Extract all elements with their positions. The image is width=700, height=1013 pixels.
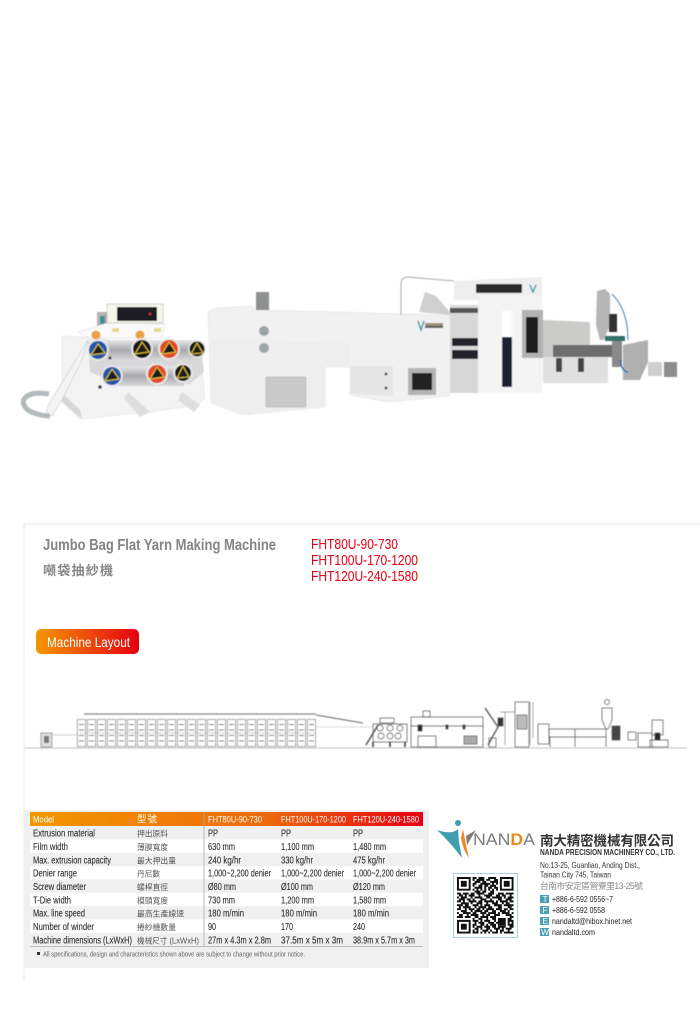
row: max line speed: 180 m/min: [208, 908, 244, 920]
row: denier range: 1,000~2,200 denier: [281, 868, 344, 880]
row: extrusion material: 押出原料: [137, 828, 168, 838]
machine photo: [23, 277, 677, 419]
table header: FHT120U-240-1580: [353, 814, 419, 826]
row: t-die width: 730 mm: [208, 896, 235, 906]
row: extrusion material: PP: [353, 828, 363, 840]
row: number of winder: Number of winder: [33, 922, 95, 933]
machine layout button: Machine Layout: [47, 634, 130, 650]
row: t-die width: 1,580 mm: [353, 896, 386, 906]
row: denier range: Denier range: [33, 868, 77, 880]
table header: FHT80U-90-730: [208, 814, 262, 826]
row: max line speed: 最高生產線速: [137, 908, 184, 918]
row: max line speed: 180 m/min: [281, 908, 317, 920]
contact list: +886-6-592 0558: [552, 905, 605, 915]
row: film width: 630 mm: [208, 842, 235, 853]
row: film width: [33, 842, 386, 853]
row: screw diameter: Ø100 mm: [281, 882, 313, 893]
row: denier range: [33, 868, 416, 880]
title: [43, 537, 276, 578]
contact list: W: [541, 927, 549, 937]
row: number of winder: 170: [281, 922, 293, 933]
table header: FHT100U-170-1200: [281, 814, 346, 826]
row: max extrusion capacity: 最大押出量: [137, 856, 176, 866]
extruder outline: [538, 700, 668, 747]
row: t-die width: 1,200 mm: [281, 896, 314, 906]
row: machine dimensions: 38.9m x 5.7m x 3m: [353, 936, 415, 946]
row: machine dimensions: 27m x 4.3m x 2.8m: [208, 936, 271, 946]
contact list: nandaltd.com: [552, 927, 595, 937]
row: film width: Film width: [33, 842, 68, 853]
company name: 南大精密機械有限公司: [540, 832, 674, 848]
QR code: [454, 874, 518, 938]
table header: Model: [33, 814, 54, 826]
model list: FHT80U-90-730: [311, 537, 398, 553]
address: 台南市安定區管寮里13-25號: [540, 880, 643, 891]
row: number of winder: 捲紗機數量: [137, 922, 176, 932]
machine layout drawing: [25, 700, 687, 748]
row: extrusion material: Extrusion material: [33, 828, 95, 840]
machine layout button: [36, 629, 139, 654]
model list: FHT120U-240-1580: [311, 569, 418, 585]
row: machine dimensions: 機械尺寸 (LxWxH): [137, 936, 199, 946]
row: denier range: 1,000~2,200 denier: [208, 868, 271, 880]
disclaimer note: All specifications, design and characteristics shown above are subject to change without prior notice.: [43, 952, 305, 958]
row: screw diameter: [33, 882, 385, 893]
row: screw diameter: Screw diameter: [33, 882, 87, 893]
title: Jumbo Bag Flat Yarn Making Machine: [43, 537, 276, 554]
row: max extrusion capacity: [33, 856, 386, 866]
spec table panel: [24, 810, 429, 968]
contact list: F: [542, 905, 548, 915]
calender outline: [485, 702, 533, 747]
oven unit: [208, 292, 452, 415]
row: max line speed: [33, 908, 389, 920]
row: number of winder: 240: [353, 922, 365, 933]
title: 噸袋抽紗機: [43, 563, 113, 578]
company name: [540, 832, 675, 857]
address: No.13-25, Guanliao, Anding Dist.,: [540, 860, 640, 870]
contact list: [540, 894, 633, 937]
row: number of winder: [33, 922, 365, 933]
row: number of winder: 90: [208, 922, 216, 933]
contact list: nandaltd@hibox.hinet.net: [552, 916, 633, 926]
row: max extrusion capacity: 240 kg/hr: [208, 856, 242, 866]
row: extrusion material: PP: [208, 828, 218, 840]
row: t-die width: T-Die width: [33, 896, 71, 906]
row: screw diameter: Ø80 mm: [208, 882, 236, 893]
row: film width: 薄膜寬度: [137, 842, 168, 852]
row: t-die width: 模頭寬度: [137, 896, 168, 906]
extruder: [543, 289, 677, 383]
company logo: [437, 820, 535, 858]
address: Tainan City 745, Taiwan: [540, 870, 611, 880]
row: max extrusion capacity: Max. extrusion capacity: [33, 856, 111, 866]
row: max line speed: 180 m/min: [353, 908, 389, 920]
row: extrusion material: PP: [281, 828, 291, 840]
oven outline: [411, 711, 483, 747]
row: max extrusion capacity: 475 kg/hr: [353, 856, 386, 866]
address: [540, 860, 643, 891]
model list: FHT100U-170-1200: [311, 553, 418, 569]
white table rows: [30, 840, 423, 933]
row: denier range: 1,000~2,200 denier: [353, 868, 416, 880]
row: screw diameter: 螺桿直徑: [137, 882, 168, 892]
calender tower: [401, 277, 543, 393]
winder unit: [23, 304, 206, 419]
row: machine dimensions: 37.5m x 5m x 3m: [281, 936, 343, 946]
row: max line speed: Max. line speed: [33, 908, 85, 920]
contact list: E: [542, 916, 548, 926]
row: denier range: 丹尼數: [137, 868, 160, 878]
row: machine dimensions: Machine dimensions (LxWxH): [33, 936, 132, 946]
contact list: T: [542, 894, 548, 904]
winder outline: [366, 718, 407, 747]
row: t-die width: [33, 896, 386, 906]
row: screw diameter: Ø120 mm: [353, 882, 385, 893]
contact list: +886-6-592 0556~7: [552, 894, 613, 904]
panel frame: [24, 524, 700, 981]
row: extrusion material: [33, 828, 363, 840]
table header: [30, 812, 423, 826]
company logo: NANDA: [473, 831, 535, 849]
model list: [311, 537, 418, 585]
row: max extrusion capacity: 330 kg/hr: [281, 856, 314, 866]
row: film width: 1,480 mm: [353, 842, 386, 853]
table header: 型 號: [137, 814, 157, 826]
row: machine dimensions: [33, 936, 415, 946]
row: film width: 1,100 mm: [281, 842, 314, 853]
